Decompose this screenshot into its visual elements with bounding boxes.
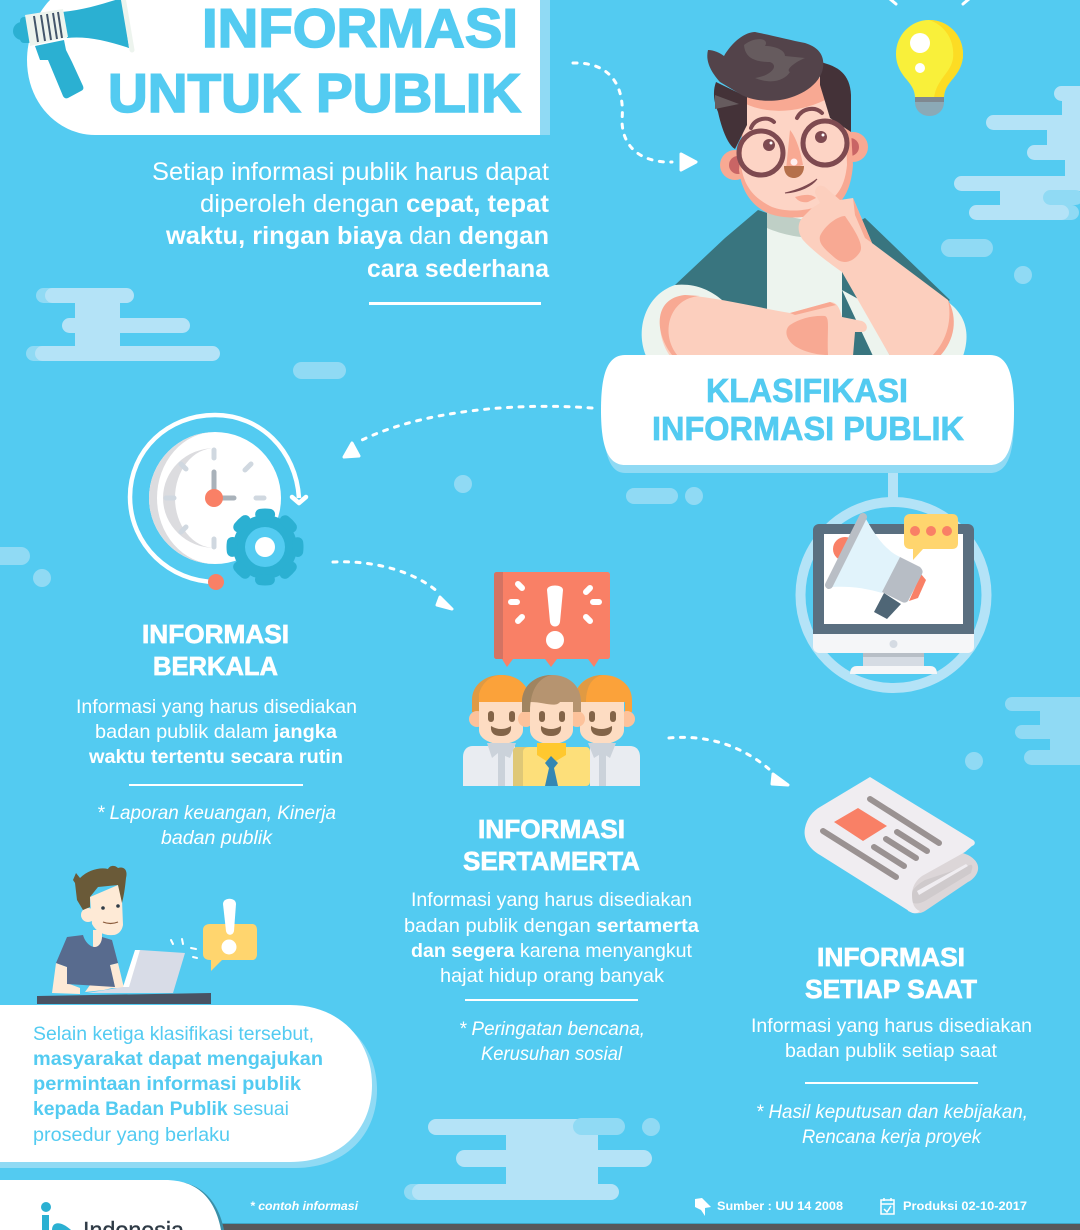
arrow: classification to berkala (344, 406, 592, 457)
callout text: Selain ketiga klasifikasi tersebut, (33, 1023, 314, 1045)
icon: alert and three people (463, 572, 640, 786)
example: * Hasil keputusan dan kebijakan, (756, 1101, 1028, 1123)
table (37, 993, 211, 1004)
heading: INFORMASI (817, 942, 965, 972)
icon: clock and gear (130, 415, 306, 590)
section: informasi setiap saat (751, 942, 1032, 1148)
icon: megaphone (13, 0, 132, 98)
decorative bubbles and mid clouds (0, 475, 1080, 770)
production date (881, 1198, 1027, 1214)
description: hajat hidup orang banyak (440, 965, 664, 987)
description: waktu tertentu secara rutin (88, 746, 343, 768)
source: Sumber : UU 14 2008 (717, 1199, 843, 1213)
callout text: permintaan informasi publik (33, 1073, 301, 1095)
intro text: waktu, ringan biaya dan dengan (165, 222, 549, 250)
head (73, 866, 127, 935)
example: Rencana kerja proyek (802, 1126, 982, 1148)
alert bubble (203, 899, 257, 971)
heading (463, 814, 640, 876)
centre person (513, 675, 590, 786)
klasifikasi card (601, 355, 1014, 473)
cloud: left upper (26, 288, 346, 379)
icon: pin (695, 1198, 711, 1216)
callout text (33, 1023, 323, 1146)
heading (652, 372, 964, 447)
description: badan publik setiap saat (785, 1040, 998, 1062)
side people (463, 675, 640, 786)
production date: Produksi 02-10-2017 (903, 1199, 1027, 1213)
arrow: berkala to sertamerta (333, 562, 452, 609)
cloud: bottom centre (404, 1118, 660, 1200)
header panel (13, 0, 550, 135)
head (739, 72, 853, 218)
footnote: * contoh informasi (250, 1199, 359, 1213)
logo panel (0, 1180, 224, 1230)
intro text: Setiap informasi publik harus dapat (152, 158, 549, 186)
description: Informasi yang harus disediakan (411, 889, 692, 911)
example (756, 1101, 1028, 1148)
title (108, 0, 521, 124)
left arm with pointing hand (660, 295, 867, 356)
heading: INFORMASI (478, 814, 625, 844)
logo mark (41, 1202, 71, 1230)
section: informasi berkala (76, 619, 357, 849)
nose and mouth (784, 158, 817, 202)
heading: BERKALA (153, 651, 278, 681)
illustration: person with laptop (37, 866, 257, 1004)
intro text: cara sederhana (367, 255, 550, 283)
description (76, 696, 357, 768)
character: thinking man (642, 32, 967, 356)
heading: KLASIFIKASI (706, 372, 908, 409)
arrow: sertamerta to setiap saat (669, 737, 788, 785)
intro text: diperoleh dengan cepat, tepat (200, 190, 550, 218)
ears (720, 132, 868, 180)
example: Kerusuhan sosial (481, 1043, 623, 1065)
source (695, 1198, 843, 1216)
arms and neck (52, 930, 124, 994)
section: informasi sertamerta (404, 814, 699, 1065)
right arm with fist (799, 186, 954, 356)
example: * Laporan keuangan, Kinerja (97, 802, 336, 824)
description: badan publik dalam jangka (95, 721, 337, 743)
heading: INFORMASI PUBLIK (652, 410, 964, 447)
faces (488, 711, 616, 736)
heading: SETIAP SAAT (805, 974, 977, 1004)
callout text: kepada Badan Publik sesuai (33, 1098, 289, 1120)
heading: INFORMASI (142, 619, 289, 649)
callout text: masyarakat dapat mengajukan (33, 1048, 323, 1070)
cloud: right upper (941, 86, 1080, 284)
example (459, 1018, 645, 1065)
laptop (87, 950, 185, 993)
heading: SERTAMERTA (463, 846, 640, 876)
arrow: title to character (573, 63, 696, 170)
example: * Peringatan bencana, (459, 1018, 645, 1040)
icon: monitor with megaphone (800, 473, 986, 688)
sleeves (642, 285, 967, 356)
jacket (660, 210, 950, 356)
description: dan segera karena menyangkut (411, 940, 693, 962)
description: badan publik dengan sertamerta (404, 915, 699, 937)
shirt (767, 213, 890, 356)
glasses and eyes (739, 109, 847, 175)
heading (142, 619, 289, 681)
description (404, 889, 699, 987)
example: badan publik (161, 827, 273, 849)
description (751, 1015, 1032, 1062)
panel: request info callout (0, 1005, 377, 1168)
description: Informasi yang harus disediakan (76, 696, 357, 718)
footer bar (0, 1223, 1080, 1230)
example (97, 802, 336, 849)
description: Informasi yang harus disediakan (751, 1015, 1032, 1037)
heading (805, 942, 977, 1004)
hair (707, 32, 851, 149)
title: UNTUK PUBLIK (108, 62, 521, 124)
icon: newspaper (805, 777, 978, 913)
t-shirt (56, 935, 118, 987)
intro text (152, 158, 550, 305)
callout text: prosedur yang berlaku (33, 1124, 230, 1146)
icon: calendar (881, 1198, 894, 1214)
alert bubble (494, 572, 610, 667)
icon: light bulb (890, 0, 969, 116)
